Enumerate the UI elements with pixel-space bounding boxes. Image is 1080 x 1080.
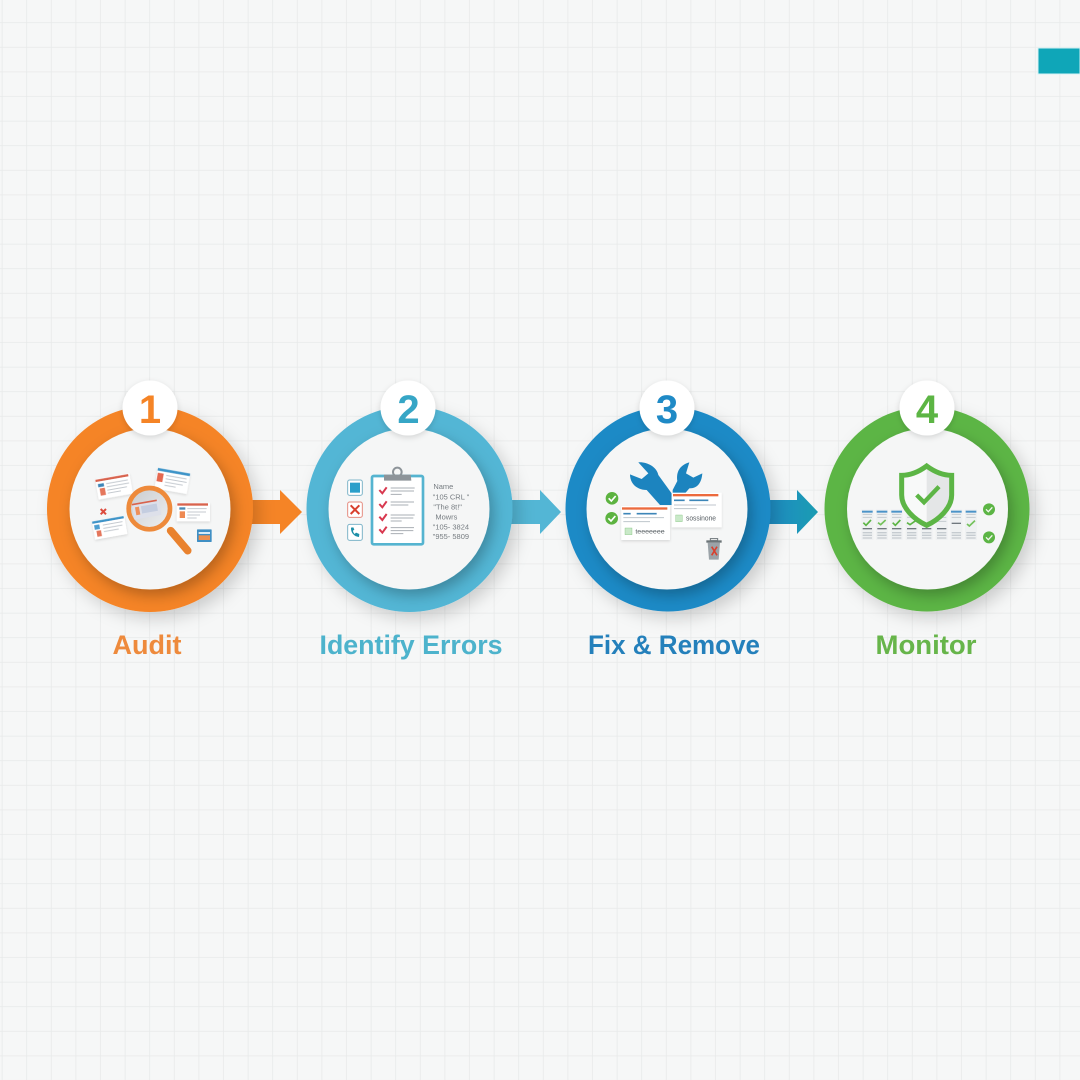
text: extracted listing details: "105 CRL " <box>433 492 470 501</box>
label: audit: Audit <box>113 630 181 660</box>
listing columns <box>861 509 977 540</box>
inner disc <box>328 428 490 590</box>
step 2: identify errors <box>306 380 512 660</box>
text: extracted listing details: "105- 3824 <box>433 522 469 531</box>
blue ring <box>566 406 770 612</box>
icon: red x mark <box>101 509 106 514</box>
number badge <box>380 380 436 436</box>
number badge <box>900 380 954 436</box>
label: fix and remove: Fix & Remove <box>588 630 760 660</box>
icon: small browser window <box>197 529 212 542</box>
icon: monitored listings and shield <box>861 466 995 543</box>
text: extracted listing details: Name <box>433 482 453 491</box>
number badge: 1 <box>139 388 161 432</box>
green ring <box>824 406 1030 612</box>
inner disc <box>847 428 1008 590</box>
icon: right wrench <box>673 462 702 493</box>
icon: clipboard checklist <box>348 468 470 544</box>
icon: left wrench <box>630 462 672 505</box>
arrow: fix and remove to monitor <box>762 490 818 534</box>
label: monitor: Monitor <box>876 630 977 660</box>
icon: shield with check <box>902 466 952 525</box>
number badge: 4 <box>916 388 939 432</box>
inner disc <box>70 428 230 590</box>
number badge <box>122 380 178 436</box>
listing card: left: teeeeeee <box>635 528 665 535</box>
teal corner tab <box>1038 48 1080 74</box>
icon: magnifying glass <box>129 488 188 551</box>
text: extracted listing details <box>433 482 470 541</box>
arrow: identify errors to fix and remove <box>505 490 561 534</box>
inner disc <box>586 428 748 590</box>
text: extracted listing details: "955- 5809 <box>433 532 469 541</box>
step 1: audit <box>47 380 253 660</box>
number badge: 3 <box>656 388 678 432</box>
listing card: right: sossinone <box>686 515 716 522</box>
arrow: audit to identify errors <box>245 490 302 534</box>
icon: status tiles <box>348 480 362 540</box>
text: extracted listing details: Mowrs <box>435 512 458 521</box>
number badge <box>640 380 694 436</box>
number badge: 2 <box>397 388 420 432</box>
label: identify errors: Identify Errors <box>320 630 502 660</box>
icon: wrenches and listing cards <box>605 462 722 560</box>
step 4: monitor <box>824 380 1030 660</box>
orange ring <box>47 406 253 612</box>
light blue ring <box>306 406 512 612</box>
icon: green check badges <box>605 492 618 525</box>
icon: green check badges <box>983 503 995 543</box>
step 3: fix and remove <box>566 380 770 660</box>
icon: trash can <box>706 539 722 560</box>
icon: business listing cards under magnifier <box>92 468 212 551</box>
text: extracted listing details: "The 8t!" <box>433 502 462 511</box>
